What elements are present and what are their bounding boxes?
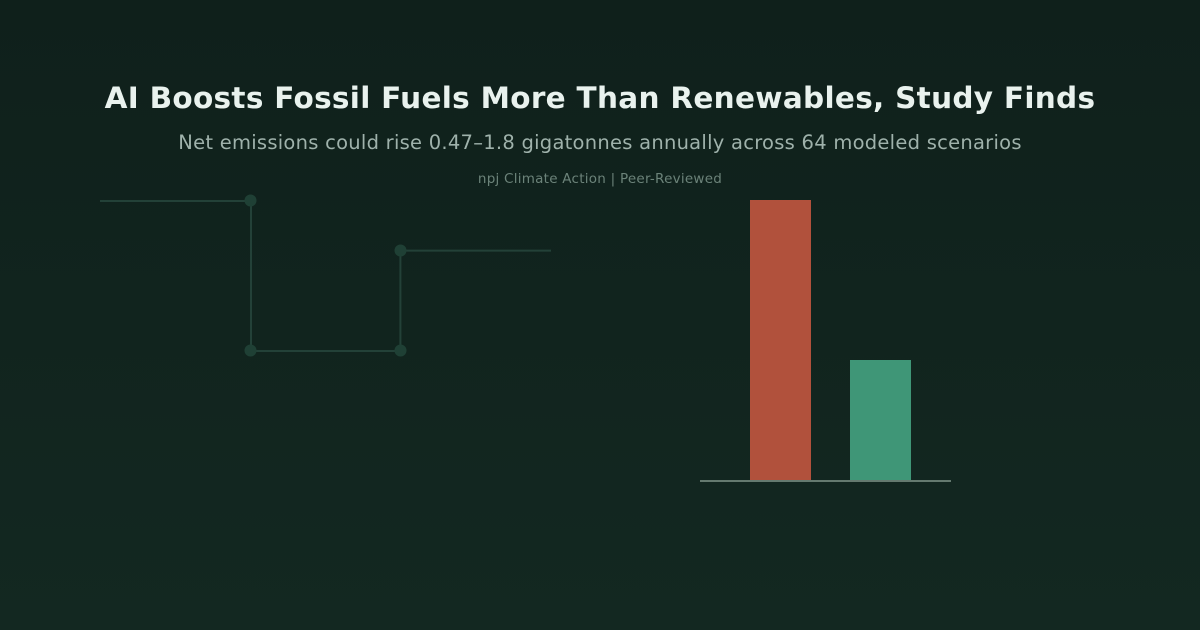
bar chart	[700, 200, 951, 482]
chart baseline	[700, 480, 951, 482]
subtitle: Net emissions could rise 0.47–1.8 gigatonnes annually across 64 modeled scenarios	[178, 131, 1022, 154]
title: AI Boosts Fossil Fuels More Than Renewables, Study Finds	[105, 81, 1095, 115]
bar: renewables	[850, 360, 911, 481]
bar: fossil fuels	[750, 200, 811, 481]
source line: npj Climate Action | Peer-Reviewed	[478, 171, 722, 187]
stepped line diagram	[100, 194, 551, 356]
